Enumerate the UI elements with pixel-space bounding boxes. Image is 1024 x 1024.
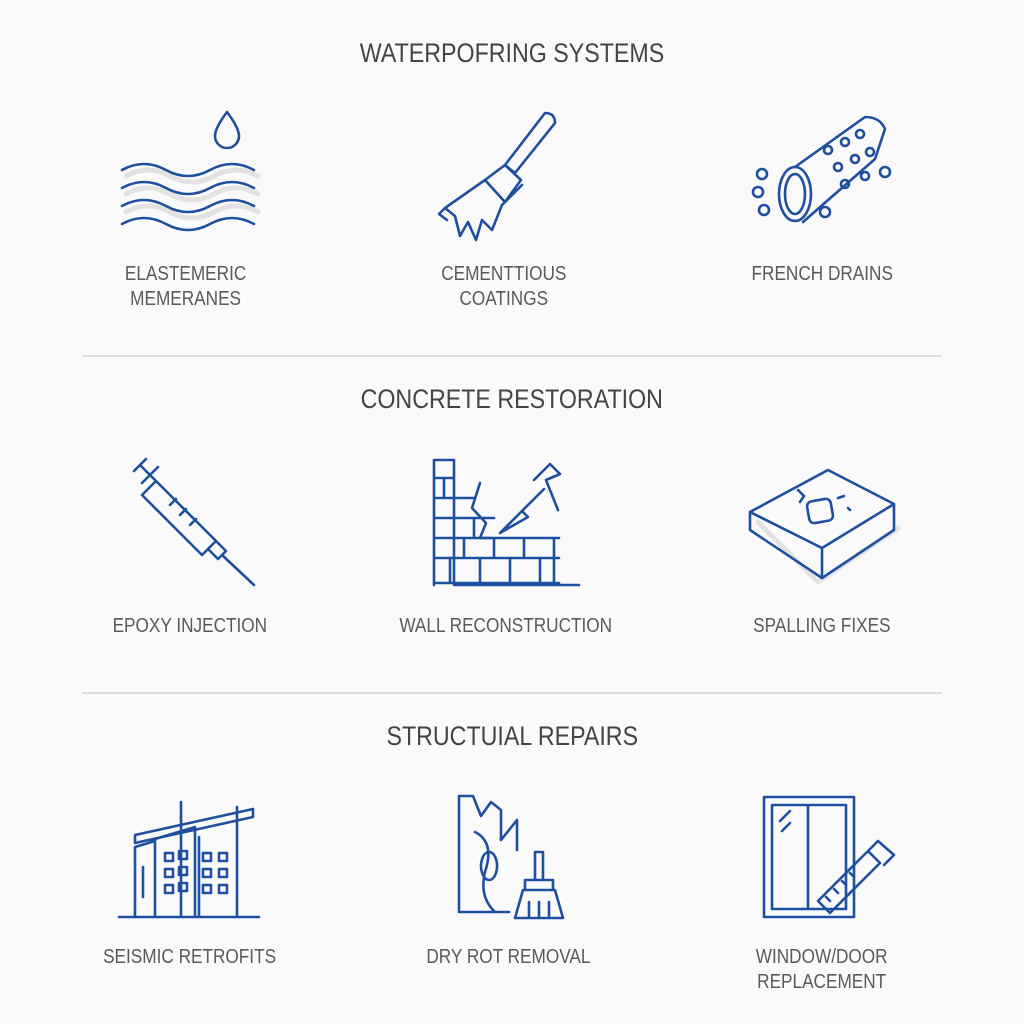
label: dry rot removal: DRY ROT REMOVAL bbox=[426, 946, 590, 968]
label: window/door replacement bbox=[756, 946, 888, 993]
icon: water waves bbox=[120, 110, 260, 232]
label: wall reconstruction: WALL RECONSTRUCTION bbox=[400, 615, 612, 637]
label: window/door replacement: WINDOW/DOOR bbox=[756, 946, 888, 968]
label: french drains: FRENCH DRAINS bbox=[751, 263, 893, 285]
icon: brush coating bbox=[438, 112, 556, 242]
icon: brick wall with hammer bbox=[432, 458, 580, 586]
heading: concrete restoration: CONCRETE RESTORATION bbox=[361, 384, 663, 414]
icon: syringe bbox=[132, 458, 256, 586]
label: cementitious coatings: COATINGS bbox=[460, 288, 548, 310]
label: cementitious coatings bbox=[441, 263, 567, 310]
label: elastomeric membranes bbox=[125, 263, 247, 310]
icon: spalling slab bbox=[748, 468, 900, 584]
label: elastomeric membranes: MEMERANES bbox=[131, 288, 241, 310]
label: elastomeric membranes: ELASTEMERIC bbox=[125, 263, 247, 285]
label: seismic retrofits: SEISMIC RETROFITS bbox=[104, 946, 276, 968]
heading: structural repairs: STRUCTUIAL REPAIRS bbox=[386, 721, 638, 751]
label: epoxy injection: EPOXY INJECTION bbox=[113, 615, 267, 637]
icon: dry rot wood with brush bbox=[458, 794, 564, 920]
icon: seismic building bbox=[118, 800, 260, 918]
icon: french drain pipe bbox=[752, 116, 892, 224]
label: window/door replacement: REPLACEMENT bbox=[757, 971, 887, 993]
heading: waterproofing systems: WATERPOFRING SYSTEMS bbox=[360, 38, 664, 68]
icon: window with saw bbox=[762, 796, 896, 918]
label: spalling fixes: SPALLING FIXES bbox=[753, 615, 891, 637]
label: cementitious coatings: CEMENTTIOUS bbox=[441, 263, 567, 285]
